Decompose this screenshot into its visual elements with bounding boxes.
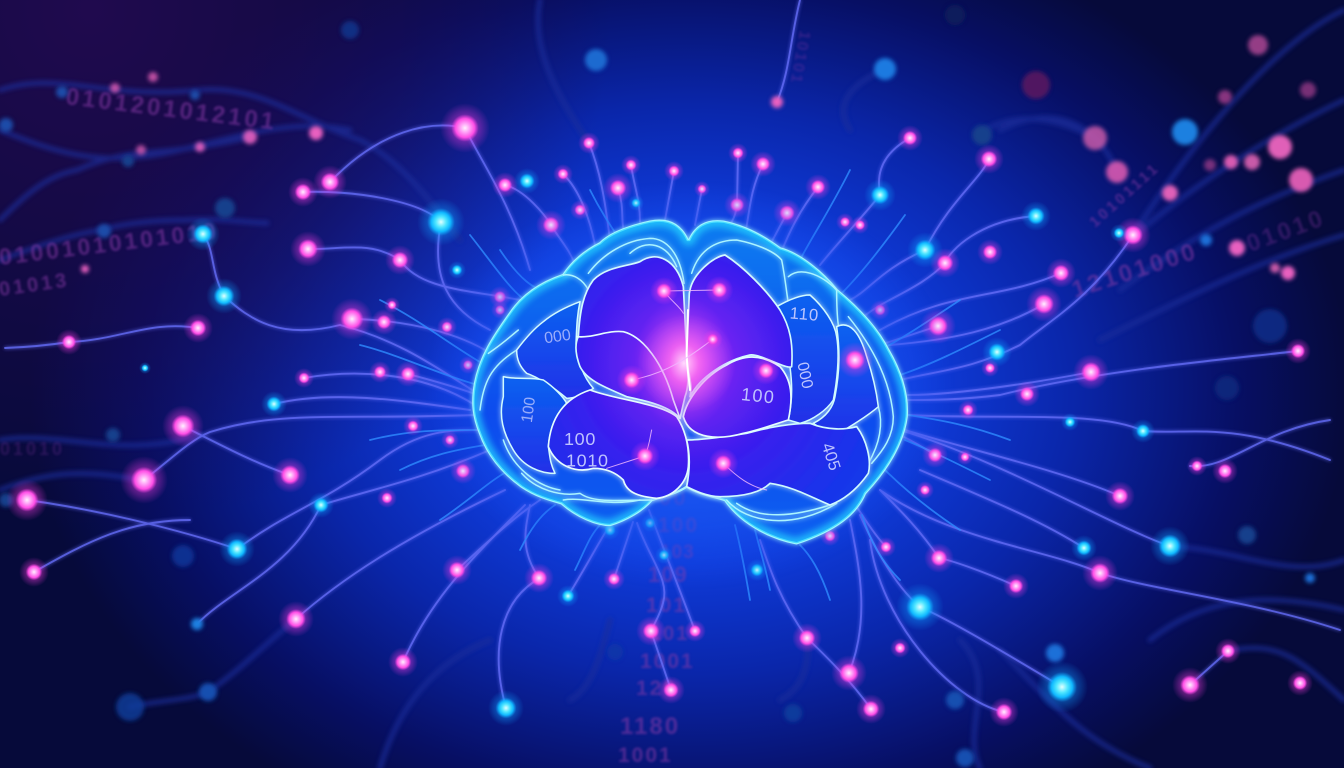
binary streams in the background: 01001010101010 — [0, 217, 220, 270]
brain — [473, 221, 907, 543]
binary streams in the background: 1180 — [620, 713, 680, 740]
binary streams in the background: 101 — [646, 594, 687, 617]
left small lobe — [517, 302, 593, 398]
binary streams in the background: 1001 — [640, 650, 695, 673]
dense blue fibre fan around the brain — [360, 170, 1010, 600]
far left lobe — [501, 377, 567, 473]
binary streams in the background: 1001 — [618, 744, 673, 767]
synapse links inside brain — [607, 290, 767, 490]
binary streams in the background: 12101000 — [1069, 238, 1201, 304]
cyan inner rim glow — [473, 221, 907, 543]
synapse nodes inside brain — [617, 276, 873, 478]
binary labels on lobes: 100 — [740, 384, 776, 408]
upper left frontal lobe — [576, 257, 688, 418]
outer cortex fold lines — [480, 238, 893, 521]
binary streams in the background: 00 — [659, 485, 687, 510]
binary streams in the background: 100 — [658, 514, 699, 537]
binary labels on lobes: 100 — [519, 396, 539, 424]
bottom right lobe — [687, 423, 869, 505]
bottom left lobe — [548, 390, 689, 498]
binary streams in the background: 109 — [648, 562, 688, 587]
lower left frontal fold — [577, 331, 680, 418]
binary streams in the background: 01010 — [1243, 204, 1329, 258]
upper right frontal lobe — [687, 255, 792, 397]
binary streams in the background: 01010 — [0, 439, 65, 459]
brain outer silhouette — [473, 221, 907, 543]
binary labels on lobes: 000 — [543, 327, 572, 347]
right parietal lobe — [777, 295, 838, 423]
central fissure highlight — [687, 310, 690, 390]
binary labels on lobes: 1010 — [566, 451, 609, 471]
binary streams in the background: 0101201012101 — [64, 83, 279, 136]
right temporal lobes with binary — [813, 325, 878, 437]
binary labels on lobes: 100 — [564, 429, 596, 449]
binary streams in the background: 103 — [660, 542, 695, 563]
binary labels on lobes — [519, 303, 844, 473]
binary labels on lobes: 110 — [789, 303, 820, 325]
blue halo behind brain — [425, 180, 955, 590]
binary streams in the background: 101 — [650, 623, 689, 645]
inner right lobe — [683, 357, 791, 437]
binary streams in the background: 10101 — [787, 29, 813, 86]
lobes — [501, 255, 878, 505]
glowing cyan nodes — [139, 168, 1190, 726]
binary streams in the background: 120 — [636, 677, 677, 700]
binary labels on lobes: 000 — [793, 361, 816, 390]
glowing pink nodes — [6, 103, 1313, 727]
binary streams in the background: 10101111 — [1086, 159, 1163, 231]
central pink glow — [634, 297, 734, 430]
binary labels on lobes: 405 — [818, 440, 844, 473]
